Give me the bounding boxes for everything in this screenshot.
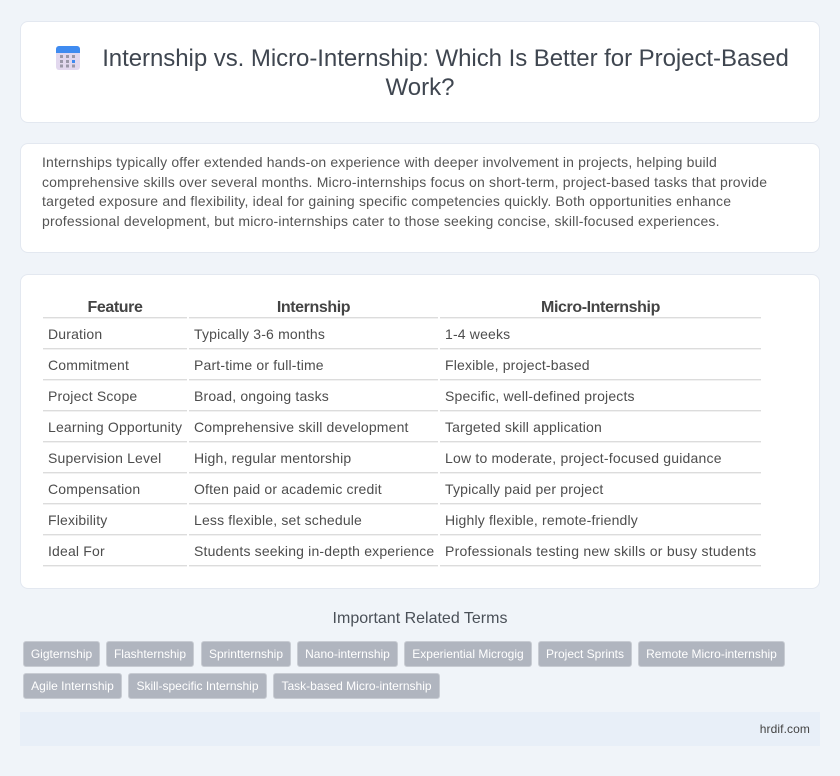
tag: Task-based Micro-internship: Task-based Micro-internship	[281, 679, 432, 693]
tag: Skill-specific Internship	[128, 673, 267, 699]
tag: Nano-internship: Nano-internship	[305, 647, 390, 661]
comparison table: Professionals testing new skills or busy students	[445, 543, 756, 559]
tag: Flashternship	[106, 641, 194, 667]
tag: Project Sprints	[538, 641, 632, 667]
comparison table: Targeted skill application	[445, 419, 602, 435]
tag: Gigternship: Gigternship	[31, 647, 92, 661]
comparison table: Typically 3-6 months	[194, 326, 325, 342]
comparison table: Highly flexible, remote-friendly	[445, 512, 638, 528]
title	[102, 45, 789, 101]
tag: Gigternship	[23, 641, 100, 667]
title: Work?	[386, 74, 454, 101]
tag: Agile Internship	[23, 673, 122, 699]
comparison table: Typically paid per project	[445, 481, 604, 497]
footer bar	[20, 712, 820, 746]
tag: Sprintternship: Sprintternship	[209, 647, 283, 661]
panel: comparison table	[20, 274, 820, 589]
intro paragraph: targeted exposure and flexibility, ideal for gaining specific competencies quickly. Both opportunities enhance	[42, 193, 731, 209]
tag: Experiential Microgig: Experiential Microgig	[412, 647, 524, 661]
icon: calendar	[56, 46, 80, 70]
footer source: hrdif.com	[760, 722, 810, 736]
comparison table: Flexible, project-based	[445, 357, 590, 373]
tag: Task-based Micro-internship	[273, 673, 440, 699]
intro paragraph: professional development, but micro-internships cater to those seeking concise, skill-focused experiences.	[42, 213, 720, 229]
tag: Sprintternship	[201, 641, 291, 667]
comparison table: High, regular mentorship	[194, 450, 351, 466]
tag: Agile Internship: Agile Internship	[31, 679, 114, 693]
comparison table: Compensation	[48, 481, 140, 497]
comparison table: Duration	[48, 326, 102, 342]
intro paragraph	[42, 154, 767, 229]
comparison table: Commitment	[48, 357, 129, 373]
title: Internship vs. Micro-Internship: Which Is Better for Project-Based	[102, 45, 789, 72]
comparison table: Less flexible, set schedule	[194, 512, 362, 528]
intro paragraph: comprehensive skills over several months. Micro-internships focus on short-term, project-based tasks that provide	[42, 174, 767, 190]
comparison table: Broad, ongoing tasks	[194, 388, 329, 404]
comparison table: 1-4 weeks	[445, 326, 510, 342]
comparison table: Supervision Level	[48, 450, 161, 466]
comparison table: Comprehensive skill development	[194, 419, 409, 435]
comparison table: Specific, well-defined projects	[445, 388, 635, 404]
comparison table: Often paid or academic credit	[194, 481, 382, 497]
comparison table: Students seeking in-depth experience	[194, 543, 434, 559]
tag: Nano-internship	[297, 641, 398, 667]
tag: Skill-specific Internship: Skill-specific Internship	[136, 679, 259, 693]
tag: Experiential Microgig	[404, 641, 532, 667]
related term tags	[23, 641, 785, 699]
comparison table: Learning Opportunity	[48, 419, 182, 435]
comparison table: Internship	[277, 298, 350, 316]
comparison table: Micro-Internship	[541, 298, 660, 316]
intro paragraph: Internships typically offer extended hands-on experience with deeper involvement in projects, helping build	[42, 154, 717, 170]
comparison table: Part-time or full-time	[194, 357, 324, 373]
comparison table: Flexibility	[48, 512, 107, 528]
panel: intro text	[20, 143, 820, 253]
tag: Project Sprints: Project Sprints	[546, 647, 624, 661]
tag: Remote Micro-internship: Remote Micro-internship	[646, 647, 777, 661]
panel: title header	[20, 21, 820, 123]
tag: Flashternship: Flashternship	[114, 647, 186, 661]
header: Feature: Feature	[88, 298, 142, 316]
comparison table: Project Scope	[48, 388, 137, 404]
comparison table	[43, 298, 761, 567]
comparison table: Low to moderate, project-focused guidance	[445, 450, 722, 466]
heading: related terms: Important Related Terms	[333, 610, 507, 627]
tag: Remote Micro-internship	[638, 641, 785, 667]
comparison table: Ideal For	[48, 543, 105, 559]
